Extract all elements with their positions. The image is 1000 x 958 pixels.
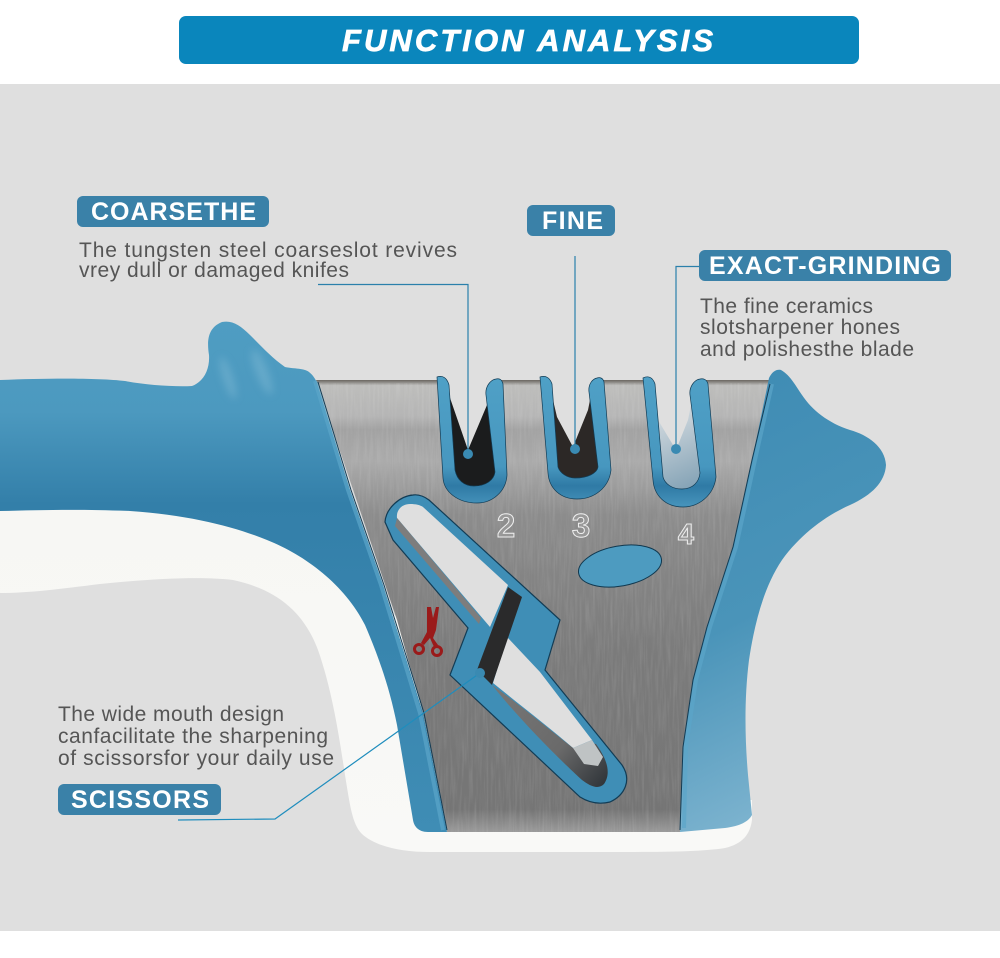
left blue handle <box>0 322 447 832</box>
oval button <box>575 539 665 593</box>
leader line: coarse <box>318 284 473 459</box>
title bar <box>179 16 859 64</box>
text: exact-grinding description: and polishesthe blade <box>700 338 914 361</box>
embossed numbers: 3 <box>572 507 590 544</box>
scissors slot <box>385 495 627 803</box>
label: fine <box>527 205 615 236</box>
knife sharpener product illustration <box>0 322 886 852</box>
leader line: exact-grinding <box>671 266 699 454</box>
handle inner light edge <box>315 381 443 830</box>
slot 3 <box>643 377 716 507</box>
text: exact-grinding description <box>700 295 914 361</box>
label: coarsethe: COARSETHE <box>91 198 256 226</box>
text: coarse description <box>79 239 457 282</box>
leader line: fine <box>570 256 580 454</box>
text: exact-grinding description: slotsharpener hones <box>700 316 900 339</box>
label: fine: FINE <box>542 207 603 235</box>
text: scissors description <box>58 703 334 770</box>
text: scissors description: of scissorsfor your daily use <box>58 747 334 770</box>
text: exact-grinding description: The fine ceramics <box>700 295 873 318</box>
label: exact-grinding: EXACT-GRINDING <box>709 252 941 280</box>
right blue handle <box>680 370 886 832</box>
metal plate <box>310 380 780 833</box>
text: coarse description: vrey dull or damaged knifes <box>79 259 349 282</box>
embossed numbers <box>497 507 694 551</box>
slot 2 <box>540 376 611 499</box>
text: scissors description: canfacilitate the sharpening <box>58 725 328 748</box>
text: scissors description: The wide mouth design <box>58 703 284 726</box>
label: scissors: SCISSORS <box>71 786 209 814</box>
white base of handle <box>0 505 752 852</box>
text: coarse description: The tungsten steel coarseslot revives <box>79 239 457 262</box>
right handle inner light edge <box>684 384 772 828</box>
leader line: scissors <box>178 668 485 820</box>
title bar: FUNCTION ANALYSIS <box>342 23 713 58</box>
scissors icon <box>414 607 442 656</box>
handle fin highlights <box>216 347 277 400</box>
slot 1 <box>437 376 507 503</box>
embossed numbers: 4 <box>678 519 694 551</box>
embossed numbers: 2 <box>497 507 515 544</box>
